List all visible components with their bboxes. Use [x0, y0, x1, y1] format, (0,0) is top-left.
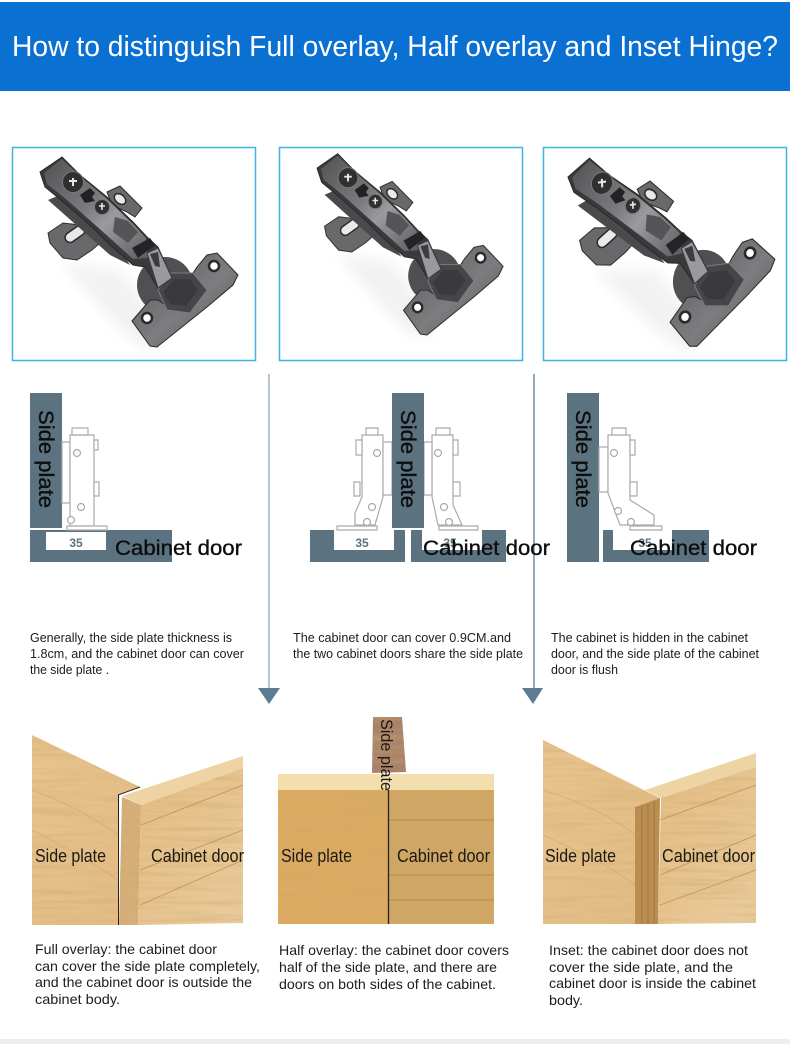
diagram: inset: [567, 393, 757, 562]
text: half overlay hinge description: the two cabinet doors share the side plate: [293, 646, 523, 661]
side plate label: Side plate: [571, 410, 594, 508]
caption: half overlay: Half overlay: the cabinet door covers: [279, 942, 509, 958]
diagram: inset: 35: [638, 536, 652, 550]
panel: inset wood corner: [543, 740, 756, 924]
arrow: full overlay to half overlay column divider: [258, 374, 280, 704]
diagram: half overlay: 35: [355, 536, 369, 550]
caption: full overlay: cabinet body.: [35, 991, 120, 1007]
title: How to distinguish Full overlay, Half overlay and Inset Hinge?: [12, 31, 778, 63]
diagram: full overlay: [30, 393, 242, 562]
panel: half overlay hinge photo: [280, 148, 522, 360]
caption: full overlay: Full overlay: the cabinet door: [35, 941, 217, 957]
side plate label: Side plate: [396, 410, 419, 508]
caption: inset: body.: [549, 992, 583, 1008]
cabinet door label: Cabinet door: [630, 537, 757, 560]
panel: inset hinge photo: [544, 135, 786, 367]
caption: full overlay: can cover the side plate completely,: [35, 958, 260, 974]
caption: inset: cabinet door is inside the cabinet: [549, 975, 756, 991]
caption: inset: [549, 942, 756, 1008]
caption: half overlay: [279, 942, 509, 992]
text: inset hinge description: door, and the side plate of the cabinet: [551, 646, 759, 661]
arrow: half overlay to inset column divider: [522, 374, 543, 704]
caption: half overlay: doors on both sides of the cabinet.: [279, 976, 496, 992]
rotated side plate label: Side plate: [377, 719, 395, 791]
cabinet door label: Cabinet door: [151, 845, 244, 866]
cabinet door label: Cabinet door: [115, 537, 242, 560]
text: full overlay hinge description: 1.8cm, and the cabinet door can cover: [30, 646, 245, 661]
text: half overlay hinge description: [293, 630, 523, 661]
text: inset hinge description: door is flush: [551, 662, 618, 677]
text: inset hinge description: [551, 630, 759, 677]
panel: full overlay hinge photo: [12, 148, 256, 360]
panel: half overlay wood front: [278, 717, 494, 924]
panel: full overlay wood corner: [32, 735, 244, 925]
text: full overlay hinge description: the side plate .: [30, 662, 109, 677]
side plate label: Side plate: [281, 845, 352, 866]
side plate label: Side plate: [35, 845, 106, 866]
text: full overlay hinge description: [30, 630, 245, 677]
text: half overlay hinge description: The cabinet door can cover 0.9CM.and: [293, 630, 511, 645]
diagram: full overlay: 35: [69, 536, 83, 550]
header banner: [0, 2, 790, 91]
diagram: half overlay: [310, 393, 550, 562]
caption: inset: cover the side plate, and the: [549, 959, 733, 975]
side plate label: Side plate: [545, 845, 616, 866]
caption: inset: Inset: the cabinet door does not: [549, 942, 748, 958]
cabinet door label: Cabinet door: [662, 845, 755, 866]
caption: full overlay: and the cabinet door is outside the: [35, 974, 252, 990]
side plate label: Side plate: [34, 410, 57, 508]
caption: half overlay: half of the side plate, and there are: [279, 959, 497, 975]
text: full overlay hinge description: Generally, the side plate thickness is: [30, 630, 232, 645]
diagram: half overlay: 35: [443, 536, 457, 550]
cabinet door label: Cabinet door: [397, 845, 490, 866]
text: inset hinge description: The cabinet is hidden in the cabinet: [551, 630, 748, 645]
caption: full overlay: [35, 941, 260, 1007]
cabinet door label: Cabinet door: [423, 537, 550, 560]
